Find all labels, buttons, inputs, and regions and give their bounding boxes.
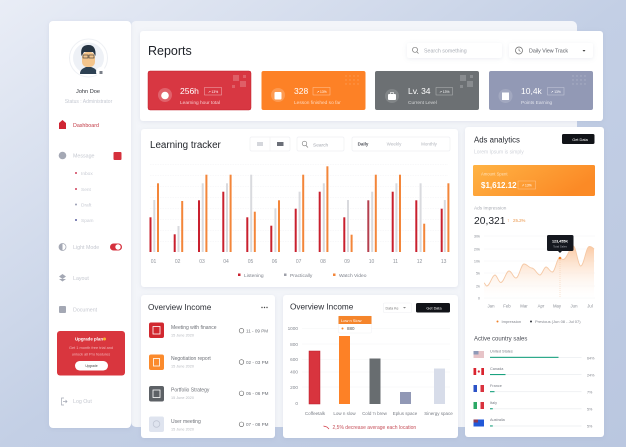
stat card: lessons: Lesson finished so far: [294, 100, 341, 106]
tooltip: [338, 316, 372, 333]
panel: reports: [140, 31, 603, 121]
line chart y axis: 5k: [476, 272, 480, 276]
heading: Reports: [148, 44, 192, 58]
stat card: lessons: 328: [294, 86, 308, 96]
chart legend: [496, 319, 581, 324]
heading: active country sales: Active country sales: [474, 336, 527, 342]
stat card: learning hours: [148, 71, 251, 110]
amount spent card: $1,612.12: [481, 181, 517, 190]
nav: light mode: Light Mode: [73, 245, 99, 251]
legend: Practically: [290, 273, 313, 279]
x axis labels: Sinergy space: [424, 411, 453, 416]
submenu: Draft: [81, 202, 92, 208]
bars: [309, 336, 445, 404]
nav: layout: Layout: [73, 276, 89, 282]
period tabs: Monthly: [421, 142, 438, 146]
x axis labels: 10: [369, 259, 374, 265]
stat card: lessons: [262, 71, 366, 110]
data dropdown: [384, 303, 412, 312]
stat card: points: Points Earning: [521, 100, 553, 106]
country: united states: [474, 350, 595, 360]
country: italy: [474, 401, 593, 412]
heading: Learning tracker: [150, 140, 222, 151]
month labels: Jan: [488, 304, 495, 308]
period tabs: [352, 137, 450, 151]
stat card: learning hours: Learning hour total: [180, 100, 220, 106]
stat card: level: Lv. 34: [408, 86, 431, 96]
bar chart: watch video: [157, 166, 449, 252]
nav: layout: [59, 274, 89, 282]
amount spent card: Amount Spent: [481, 172, 508, 176]
legend: Listening: [244, 273, 264, 279]
row: negotiation report: 15 June 2020: [171, 364, 194, 368]
tracker search: [297, 137, 344, 151]
upgrade plan card: [57, 331, 125, 376]
nav: dashboard: Dashboard: [73, 123, 99, 129]
panel: sidebar: [49, 21, 131, 428]
x axis labels: 08: [320, 259, 326, 265]
month labels: May: [553, 304, 562, 308]
more menu: [261, 307, 268, 308]
legend: [238, 273, 367, 279]
row: meeting with finance: [149, 322, 268, 338]
x axis labels: 06: [272, 259, 277, 265]
ads impression stat: Ads Impression: [474, 206, 507, 210]
nav: document: [59, 306, 98, 314]
x axis labels: [151, 259, 447, 265]
country: united states: United States: [490, 350, 513, 354]
get data button: [416, 303, 450, 312]
line chart y axis: [474, 234, 480, 300]
nav: log out: Log Out: [73, 399, 92, 405]
line chart y axis: 10k: [474, 260, 480, 264]
country: italy: 5%: [587, 408, 593, 412]
x axis labels: 03: [199, 259, 205, 265]
x axis labels: 13: [441, 259, 447, 265]
x axis labels: 04: [223, 259, 229, 265]
view track dropdown: Daily View Track: [529, 48, 568, 54]
x axis labels: [305, 411, 453, 416]
row: user meeting: User meeting: [171, 419, 201, 425]
chart legend: Previous (Jun 08 - Jul 07): [535, 319, 581, 324]
bar chart: listening: [150, 192, 443, 252]
country: canada: Canada: [490, 367, 504, 371]
line chart y axis: 0: [478, 296, 480, 300]
avatar: [70, 39, 108, 77]
row: negotiation report: Negotiation report: [171, 356, 211, 362]
row: meeting with finance: Meeting with finance: [171, 325, 217, 331]
x axis labels: 12: [417, 259, 422, 265]
y axis: 800: [290, 342, 298, 347]
upgrade plan card: unlock all Pro features: [72, 352, 110, 356]
tracker search: Search: [313, 142, 329, 148]
month labels: Apr: [538, 304, 545, 308]
heading: Overview Income: [290, 302, 354, 312]
submenu: Inbox: [81, 171, 93, 177]
stat card: points: ↗ 13%: [551, 90, 561, 94]
row: negotiation report: 02 - 03 PM: [246, 360, 269, 365]
submenu: Spam: [81, 218, 94, 224]
country: united states: 64%: [587, 356, 595, 360]
month labels: Mar: [520, 304, 528, 308]
country: france: 7%: [587, 390, 593, 394]
period tabs: Daily: [358, 142, 369, 146]
heading: Ads analytics: [474, 136, 520, 144]
get data button: Get Data: [426, 306, 442, 310]
ads impression stat: ↑: [507, 218, 510, 224]
month labels: Jul: [587, 304, 593, 308]
amount spent card: ↗ 13%: [521, 184, 532, 188]
legend: Watch Video: [339, 273, 367, 279]
country: italy: Italy: [490, 401, 497, 405]
stat card: level: [375, 71, 479, 110]
row: meeting with finance: 15 June 2020: [171, 334, 194, 338]
x axis labels: Eplus space: [393, 411, 418, 416]
y axis: 0: [295, 401, 298, 406]
view track dropdown: [509, 43, 593, 58]
panel: ads analytics: [465, 127, 604, 437]
month labels: [488, 304, 593, 308]
y axis: 1000: [288, 326, 298, 331]
panel: overview income chart: [283, 295, 458, 438]
status: Status : Administrator: [65, 99, 113, 105]
country: australia: Australia: [490, 418, 506, 422]
heading: Overview Income: [148, 303, 212, 312]
line chart y axis: 20k: [474, 248, 480, 252]
row: user meeting: 07 - 08 PM: [246, 422, 269, 427]
area line chart: [484, 246, 594, 298]
stat card: learning hours: ↗ 13%: [208, 90, 218, 94]
y axis: [288, 326, 298, 406]
line chart y axis: 2k: [476, 284, 480, 288]
y axis: 200: [290, 385, 298, 390]
row: portfolio strategy: [149, 386, 269, 402]
search box: [407, 43, 502, 58]
x axis labels: Coffeetalk: [305, 411, 326, 416]
x axis labels: Cold 'n brew: [362, 411, 388, 416]
nav: message: [59, 152, 122, 160]
amount spent card: [473, 165, 595, 196]
period tabs: Weekly: [387, 142, 402, 146]
country: canada: [474, 367, 595, 378]
chart tooltip: [547, 235, 574, 253]
upgrade plan card: Get 1 month free trial and: [69, 345, 113, 350]
row: meeting with finance: 11 - 09 PM: [246, 328, 268, 334]
stat card: points: 10,4k: [521, 86, 543, 96]
month labels: Jun: [571, 304, 578, 308]
row: negotiation report: [149, 354, 269, 370]
stat card: learning hours: 256h: [180, 86, 199, 96]
bar chart: practically: [153, 175, 446, 252]
x axis labels: Low n slow: [333, 411, 356, 416]
get data button: [562, 134, 594, 144]
submenu: Sent: [81, 187, 92, 193]
nav: log out: [62, 398, 92, 405]
row: user meeting: [149, 416, 269, 432]
country: australia: 5%: [587, 425, 593, 429]
row: portfolio strategy: Portfolio Strategy: [171, 388, 210, 394]
view toggle buttons: [250, 137, 290, 151]
x axis labels: 11: [393, 259, 398, 265]
ads impression stat: 25.2%: [513, 218, 526, 223]
trend note: 2,5% decrease average each location: [332, 425, 416, 431]
panel: overview income list: [141, 295, 275, 438]
x axis labels: 05: [248, 259, 253, 265]
nav: dashboard: [59, 120, 99, 129]
x axis labels: 01: [151, 259, 156, 265]
country: france: France: [490, 384, 502, 388]
search box: Search something: [424, 48, 467, 54]
user name: John Doe: [76, 89, 100, 95]
stat card: level: ↗ 13%: [439, 90, 450, 94]
nav: message: Message: [73, 154, 95, 160]
month labels: Feb: [503, 304, 511, 308]
row: portfolio strategy: 15 June 2020: [171, 396, 194, 400]
x axis labels: 02: [175, 259, 181, 265]
country: canada: 24%: [587, 374, 595, 378]
x axis labels: 09: [344, 259, 350, 265]
nav: light mode: [59, 244, 122, 251]
subtitle: Lorem Ipsum is simply: [474, 150, 524, 156]
ads impression stat: [474, 206, 526, 227]
get data button: Get Data: [572, 137, 589, 142]
row: portfolio strategy: 05 - 06 PM: [246, 391, 269, 396]
submenu: [75, 171, 94, 224]
chart tooltip: 123,455K: [552, 240, 568, 244]
chart legend: Impression: [502, 319, 521, 324]
stat card: points: [489, 71, 593, 110]
tooltip: 880: [347, 326, 355, 331]
panel: learning tracker: [141, 129, 458, 287]
upgrade plan card: Upgrade: [85, 364, 98, 368]
country: france: [474, 384, 593, 394]
chart tooltip: Total Sales: [553, 244, 567, 248]
stat card: lessons: ↗ 13%: [316, 90, 327, 94]
line chart y axis: 30k: [474, 234, 480, 238]
row: user meeting: 15 June 2020: [171, 428, 194, 432]
upgrade plan card: Upgrade plan: [75, 336, 103, 342]
x axis labels: 07: [296, 259, 302, 265]
tooltip: Low n Slow: [341, 318, 362, 323]
y axis: 400: [290, 370, 298, 374]
ads impression stat: 20,321: [474, 216, 506, 227]
country: australia: [474, 418, 593, 429]
nav: document: Document: [73, 308, 98, 314]
data dropdown: Data Ke: [386, 306, 398, 310]
y axis: 600: [290, 357, 298, 362]
stat card: level: Current Level: [408, 100, 437, 106]
